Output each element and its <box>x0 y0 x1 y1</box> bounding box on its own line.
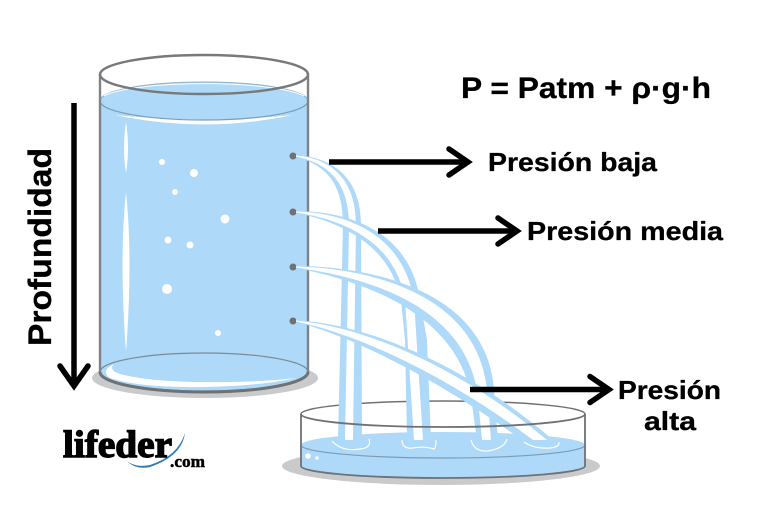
air bubbles <box>159 159 230 336</box>
formula: P = Patm + ρ·g·h <box>461 72 711 105</box>
logo: lifeder.com: lifeder <box>63 424 172 466</box>
water surface <box>100 82 308 124</box>
jet: top hole <box>296 155 362 440</box>
jet: second hole <box>296 211 431 440</box>
logo: lifeder.com: .com <box>170 452 205 471</box>
water jets <box>296 155 553 440</box>
dish water <box>301 432 585 478</box>
dish back rim <box>301 401 585 414</box>
jet: bottom hole <box>296 320 553 440</box>
splashes <box>332 439 559 451</box>
jet: third hole <box>296 266 498 440</box>
logo: lifeder.com <box>63 424 205 471</box>
glass reflections <box>122 122 130 352</box>
label: Presión baja: Presión baja <box>488 147 658 177</box>
dish bubbles <box>305 453 319 460</box>
holes in tank <box>290 152 296 324</box>
label: Presión alta <box>618 375 721 436</box>
arrow: high pressure <box>470 376 609 402</box>
receiving dish, back part <box>282 401 600 485</box>
tank floor <box>100 353 308 392</box>
depth arrow <box>60 103 88 386</box>
tank rim <box>100 55 308 94</box>
arrow: medium pressure <box>378 218 517 244</box>
label: Presión alta: alta <box>644 406 697 436</box>
tank shadow <box>92 358 318 398</box>
label: Presión media: Presión media <box>527 216 724 246</box>
cylinder tank <box>92 55 318 398</box>
tank walls <box>100 74 308 372</box>
arrow: low pressure <box>329 149 468 175</box>
label: Profundidad: Profundidad <box>22 148 58 346</box>
dish walls and base <box>301 414 585 478</box>
dish front rim <box>301 414 585 427</box>
label: Presión alta: Presión <box>618 375 721 405</box>
dish front <box>301 414 585 478</box>
dish shadow <box>282 447 600 485</box>
tank water <box>100 82 308 392</box>
dish water line <box>301 445 585 458</box>
